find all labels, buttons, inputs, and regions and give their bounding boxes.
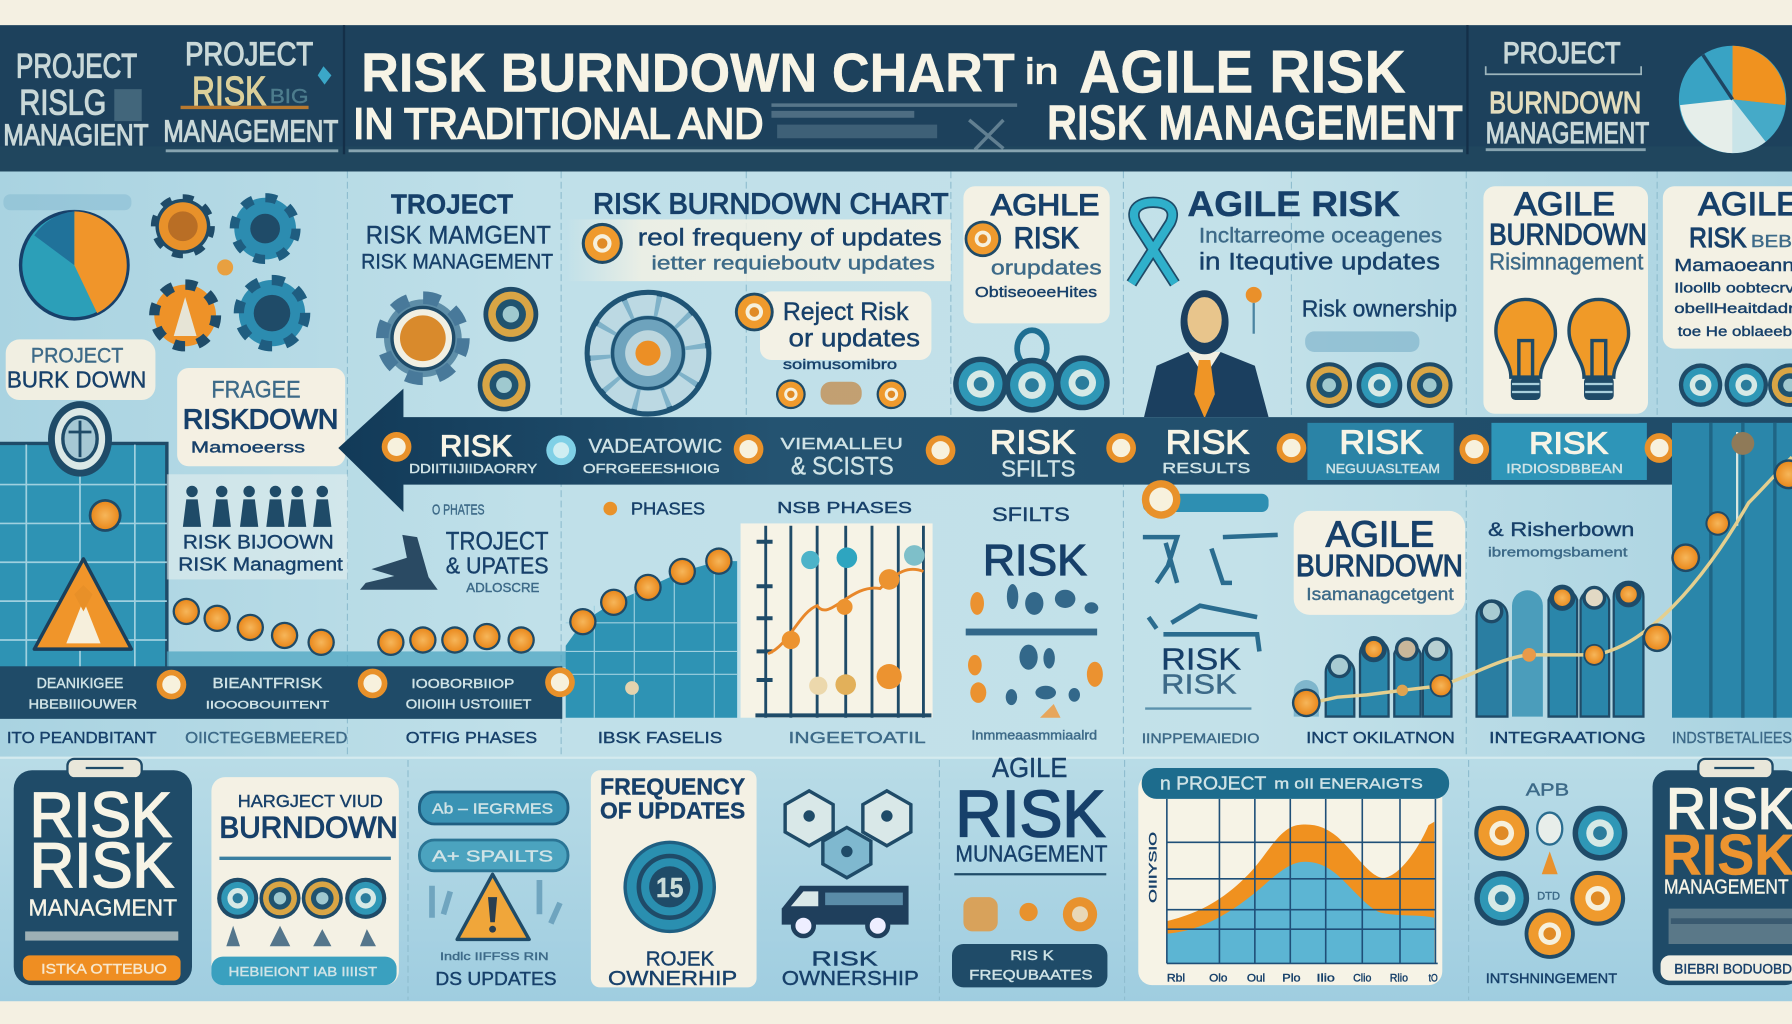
chart axis labels: Clio — [1353, 973, 1371, 985]
heading: risk burndown chart: ietter requieboutv updates — [651, 253, 935, 275]
heading: risk burndown chart: reol frequeny of updates — [638, 225, 942, 252]
pills and warning sign — [419, 792, 568, 989]
project risk management text — [361, 189, 553, 274]
callout: reject risk: soimusomibro — [783, 357, 898, 372]
pill: phases — [419, 792, 568, 824]
phase captions row: INCT OKILATNON — [1306, 730, 1455, 747]
phase labels under arrow: NSB PHASES — [777, 500, 912, 517]
card: frequency of updates: FREQUENCY — [600, 773, 745, 799]
callout: reject risk: Reject Risk — [783, 298, 909, 326]
chart axis labels: OIIIYSIO — [1148, 832, 1160, 903]
chart header — [1142, 768, 1449, 799]
callout: agile risk card — [963, 186, 1110, 323]
dark lower timeline bar: DEANIKIGEE — [37, 676, 124, 692]
block: agile risk management: RISK — [955, 778, 1105, 852]
timeline labels: VIEMALLEU — [781, 436, 903, 453]
area chart card — [1138, 768, 1449, 985]
heading: risk burndown chart: RISK BURNDOWN CHART — [593, 189, 949, 221]
risk breakdown caption: ibremomgsbament — [1488, 546, 1628, 560]
panel: agile risk right card: AGILE — [1698, 186, 1792, 222]
timeline labels: RISK — [1339, 425, 1423, 462]
callout: project burk down — [6, 339, 155, 400]
callout: risk down — [177, 368, 345, 466]
clipboard card: risk management left — [14, 759, 192, 985]
chart axis labels: Plo — [1282, 973, 1301, 985]
icon group: hexagons and van: OWNERSHIP — [782, 967, 919, 990]
icon: segmented wheel — [587, 293, 709, 414]
left grid chart panel — [0, 401, 167, 667]
panel: agile risk right card: obellHeaitdadr — [1674, 301, 1792, 316]
icon group: right medals: DTD — [1537, 890, 1560, 902]
second header block — [163, 36, 338, 149]
white pill — [1661, 955, 1792, 981]
icon: warning sign — [457, 874, 529, 939]
people and risk label panel — [167, 474, 347, 579]
icon group: right medals: APB — [1526, 779, 1569, 799]
timeline labels: RESULTS — [1162, 461, 1250, 477]
orange button: ISTKA OTTEBUO — [41, 962, 167, 977]
dark lower timeline bar: HBEBIIIOUWER — [29, 698, 137, 712]
callout: project burk down: BURK DOWN — [7, 366, 146, 392]
pill: phases: Ab – IEGRMES — [432, 802, 553, 818]
right header block: PROJECT — [1503, 37, 1621, 70]
timeline labels: VADEATOWIC — [589, 436, 722, 458]
pill: splits — [419, 840, 568, 871]
main title: IN TRADITIONAL AND — [353, 100, 763, 148]
second header block: MANAGEMENT — [163, 114, 338, 149]
left header block: PROJECT — [16, 48, 137, 86]
panel: agile risk right card: RISK — [1689, 222, 1746, 253]
icon: light bulbs — [1496, 299, 1629, 400]
dark pill — [952, 944, 1107, 987]
main title — [353, 38, 1463, 150]
chart axis labels: tO — [1429, 973, 1438, 985]
dark lower timeline bar: IOOBORBIIOP — [411, 677, 514, 691]
phase labels under arrow — [432, 498, 1070, 526]
icon: business person — [1144, 287, 1269, 418]
callout: agile risk card: AGHLE — [991, 189, 1099, 222]
timeline labels: DDIITIIJIIDAORRY — [409, 462, 538, 476]
orange bead trail: descending — [173, 598, 335, 656]
chart axis labels: Rbl — [1167, 973, 1185, 985]
risk doodle column — [966, 537, 1103, 718]
orange pin — [89, 499, 122, 532]
phase labels under arrow: SFILTS — [992, 504, 1070, 526]
phase labels under arrow: O PHATES — [432, 502, 485, 518]
timeline labels: SFILTS — [1001, 456, 1075, 482]
card: burndown: BURNDOWN — [219, 812, 398, 845]
risk doodle column two — [1142, 480, 1278, 709]
chart axis labels: Rlio — [1390, 973, 1408, 985]
clipboard card: risk management right — [1653, 759, 1792, 985]
phase captions row: INGEETOATIL — [789, 730, 926, 747]
block: agile risk management — [952, 752, 1107, 987]
icon group: right medals — [1474, 779, 1627, 986]
panel: agile risk right card: BEB — [1751, 231, 1792, 251]
second header block: PROJECT — [185, 36, 313, 72]
callout: risk down: FRAGEE — [211, 377, 301, 404]
orange button — [23, 955, 181, 981]
callout: reject risk — [735, 291, 931, 409]
main title: in — [1025, 50, 1058, 91]
dark pill: FREQUBAATES — [969, 967, 1093, 982]
phase captions row: OIICTEGEBMEERED — [185, 730, 347, 747]
chart axis labels: Olo — [1209, 973, 1227, 985]
left header block: RISLG — [19, 82, 106, 122]
dark pill: RIS K — [1010, 948, 1054, 963]
icon: round medallion — [48, 401, 112, 477]
main title: AGILE RISK — [1079, 38, 1406, 106]
risk breakdown caption: & Risherbown — [1488, 519, 1634, 541]
risk breakdown caption — [1488, 519, 1634, 560]
arrow timeline bar — [338, 389, 1792, 512]
callout: agile risk card: orupdates — [991, 256, 1102, 279]
bottom band background — [0, 757, 1792, 1001]
risk doodle column two: RISK — [1161, 642, 1242, 677]
risk doodle column: RISK — [983, 537, 1087, 585]
icon: awareness ribbon — [1131, 202, 1175, 283]
phase captions row: ITO PEANDBITANT — [7, 730, 157, 747]
second header block: BIG — [270, 85, 309, 108]
panel: agile burndown with bulbs: Risimnagement — [1489, 249, 1644, 275]
heading: agile risk: in Itequtive updates — [1199, 249, 1440, 276]
pills and warning sign: Indlc IIFFSS RIN — [440, 951, 549, 963]
header pie chart — [1679, 46, 1786, 153]
project risk management text: TROJECT — [391, 189, 513, 220]
timeline labels: OFRGEEESHIOIG — [583, 462, 720, 476]
phase captions row: IINPPEMAIEDIO — [1142, 731, 1259, 746]
bar top rings — [1329, 583, 1640, 677]
chart axis labels: Ilio — [1317, 973, 1335, 985]
card: frequency of updates: OWNERHIP — [608, 967, 737, 990]
panel: agile risk right card: Iloollb oobtecrv — [1674, 281, 1792, 296]
timeline nodes — [382, 432, 1674, 465]
card: frequency of updates: ROJEK — [646, 948, 715, 971]
phase captions row: IBSK FASELIS — [598, 730, 722, 747]
left header block: MANAGIENT — [3, 119, 149, 152]
heading: risk burndown chart — [566, 189, 951, 281]
icon group: hexagons and van — [782, 791, 919, 990]
icon: gear badges — [154, 198, 305, 346]
smudged caption above pie — [3, 194, 131, 210]
card: burndown — [211, 777, 399, 985]
timeline labels: RISK — [990, 425, 1075, 462]
icon: medal cluster — [953, 330, 1110, 413]
main title: RISK MANAGEMENT — [1047, 96, 1463, 150]
clipboard card: risk management left: RISK — [30, 781, 171, 851]
project and updates block: & UPATES — [446, 553, 549, 579]
teal band below center text — [167, 651, 567, 667]
icon: dial: 15 — [656, 872, 683, 903]
dark lower timeline bar — [0, 666, 575, 719]
phase captions row: OTFIG PHASES — [406, 730, 537, 747]
icon: dial — [625, 842, 714, 931]
pill: splits: A+ SPAILTS — [432, 849, 553, 866]
dark lower timeline bar: BIEANTFRISK — [213, 676, 322, 692]
card: frequency of updates — [591, 770, 757, 990]
icon group: right medals: INTSHNINGEMENT — [1486, 971, 1618, 986]
panel: agile burndown with bulbs — [1483, 186, 1648, 414]
phase labels under arrow: PHASES — [631, 498, 705, 518]
callout: reject risk: or updates — [789, 324, 920, 352]
heading: agile risk: AGILE RISK — [1187, 184, 1400, 224]
orange bead trail: flat — [377, 623, 535, 656]
chart axis labels — [1148, 832, 1438, 985]
card: frequency of updates: OF UPDATES — [600, 797, 745, 823]
icon: left pie chart — [21, 211, 128, 319]
icon group: hexagons and van: RISK — [811, 948, 878, 971]
callout: agile burndown — [1294, 511, 1465, 615]
teal rising chart — [566, 547, 737, 718]
project and updates block — [360, 528, 549, 595]
timeline labels: NEGUUASLTEAM — [1326, 462, 1440, 476]
card: burndown: HARGJECT VIUD — [238, 791, 383, 811]
project risk management text: RISK MANAGEMENT — [361, 249, 553, 274]
header banner — [0, 25, 1792, 171]
clipboard card: risk management left: RISK — [30, 831, 174, 901]
timeline labels: IRDIOSDBBEAN — [1506, 462, 1623, 476]
burndown bar chart — [1292, 423, 1792, 718]
icon: van — [782, 886, 909, 936]
project and updates block: ADLOSCRE — [466, 581, 539, 595]
project risk management text: RISK MAMGENT — [366, 221, 551, 249]
phase captions row: Inmmeaasmmiaalrd — [971, 728, 1097, 742]
phase captions row — [7, 728, 1792, 747]
left header block — [3, 48, 149, 152]
panel: agile burndown with bulbs: AGILE — [1514, 186, 1615, 222]
callout: project burk down: PROJECT — [31, 342, 123, 367]
heading: agile risk — [1187, 184, 1457, 352]
callout: agile burndown: Isamanagcetgent — [1306, 584, 1454, 604]
right header block: MANAGEMENT — [1486, 117, 1649, 150]
trend line with beads — [1292, 457, 1792, 717]
callout: agile burndown: BURNDOWN — [1296, 548, 1463, 583]
section dividers — [347, 171, 1657, 1000]
second header block: RISK — [192, 68, 266, 114]
callout: agile burndown: AGILE — [1326, 513, 1434, 554]
dark lower timeline bar: IIOOOBOUIITENT — [206, 700, 329, 712]
risk doodle column two: RISK — [1161, 669, 1237, 700]
heading: agile risk: Incltarreome oceagenes — [1199, 222, 1442, 247]
callout: agile risk card: ObtiseoeeHites — [975, 285, 1097, 301]
people and risk label panel: RISK Managment — [178, 553, 343, 574]
pills and warning sign: DS UPDATES — [435, 968, 557, 989]
chart header: n PROJECT — [1160, 773, 1266, 794]
icon: central gear with rings — [384, 287, 538, 411]
project and updates block: TROJECT — [446, 528, 549, 556]
callout: risk down: Mamoeerss — [191, 440, 305, 457]
chart header: m oII ENERAIGTS — [1274, 777, 1423, 793]
block: agile risk management: AGILE — [992, 752, 1067, 783]
dark lower timeline bar: OIIOIIH USTOIIIET — [406, 698, 532, 712]
people and risk label panel: RISK BIJOOWN — [183, 532, 334, 554]
timeline labels: RISK — [440, 430, 512, 463]
white pill: BIEBRI BODUOBD — [1674, 962, 1792, 977]
callout: agile risk card: RISK — [1014, 222, 1079, 255]
phase captions row: INTEGRAATIONG — [1489, 730, 1646, 747]
timeline labels: RISK — [1166, 425, 1249, 462]
timeline labels: & SCISTS — [791, 452, 894, 480]
panel: agile risk right card: toe He oblaeeb — [1678, 324, 1792, 339]
icon: hand gesture — [360, 535, 438, 590]
teal pill: HEBIEIONT IAB IIIIST — [229, 965, 378, 979]
icon: warning triangle — [34, 559, 131, 649]
title doodle — [771, 105, 1017, 150]
callout: risk down: RISKDOWN — [183, 404, 338, 435]
timeline labels: RISK — [1529, 426, 1608, 461]
scatter line chart — [741, 523, 933, 718]
teal pill — [211, 957, 397, 985]
heading: agile risk: Risk ownership — [1302, 296, 1457, 322]
icon: medal row — [1306, 362, 1453, 408]
panel: agile burndown with bulbs: BURNDOWN — [1489, 219, 1647, 252]
right header block: BURNDOWN — [1489, 85, 1641, 120]
panel: agile risk right card: Mamaoeann — [1674, 255, 1792, 275]
timeline labels — [409, 425, 1623, 482]
icon: people — [183, 486, 331, 527]
clipboard card: risk management left: MANAGMENT — [29, 894, 177, 920]
right header block — [1486, 37, 1649, 150]
main title: RISK BURNDOWN CHART — [361, 41, 1015, 103]
panel: agile risk right card — [1663, 186, 1792, 407]
block: agile risk management: MUNAGEMENT — [955, 841, 1107, 867]
chart axis labels: Oul — [1247, 973, 1265, 985]
